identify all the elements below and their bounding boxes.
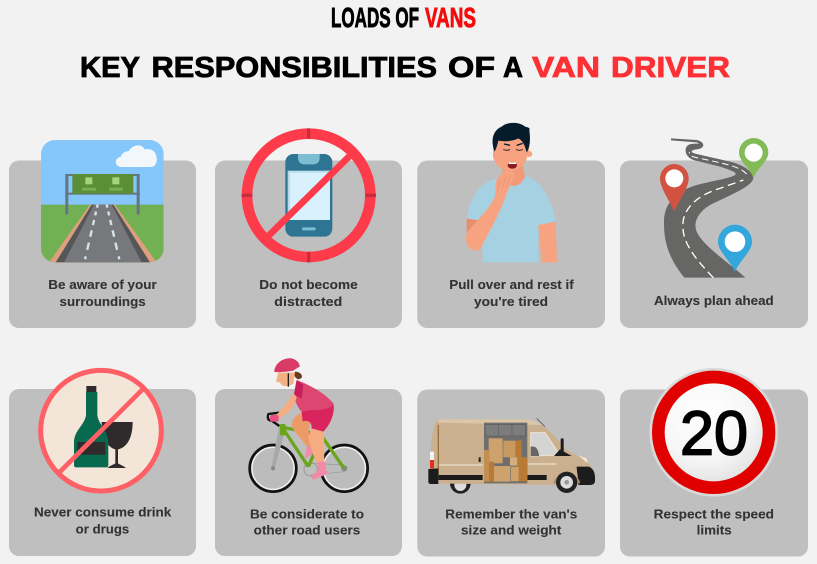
label [48,277,157,309]
panel: pull over and rest [417,123,605,328]
panel: be considerate to other road users [215,358,402,556]
label: other road users [254,523,360,538]
logo: LOADS OF [331,2,419,33]
title: RESPONSIBILITIES [152,52,437,84]
label: Remember the van's [445,506,577,521]
label: size and weight [461,523,562,538]
panel: be aware of your surroundings [9,140,196,328]
label: Be considerate to [250,506,364,521]
icon: motorway with gantry sign [41,140,164,262]
icon: crossed-out phone [242,128,376,262]
icon: crossed-out bottle and glass [41,370,161,491]
label: Always plan ahead [654,293,774,308]
panel: always plan ahead [620,138,808,328]
label: surroundings [60,294,146,309]
label [34,505,172,537]
label [259,277,358,309]
title: OF [448,52,495,84]
label: Be aware of your [48,277,157,292]
label: Pull over and rest if [449,277,574,292]
logo: VANS [425,2,476,33]
icon: delivery van with boxes [428,418,595,494]
icon: 20 speed limit sign [649,368,778,497]
title: A [503,52,523,84]
label [449,277,574,309]
label: distracted [274,294,342,309]
panel: do not become distracted [215,128,402,328]
label: you're tired [474,294,548,309]
title: VAN [532,52,600,84]
icon: 20 speed limit sign: 20 [680,400,748,469]
label [654,506,774,538]
title: KEY [80,52,140,84]
label: Do not become [259,277,358,292]
label: limits [697,523,732,538]
panel: remember the van's size and weight [417,390,605,556]
panel: respect the speed limits [620,368,808,556]
label [250,506,364,538]
label: Never consume drink [34,505,172,520]
panel: never consume drink or drugs [9,370,196,556]
label: or drugs [76,522,129,537]
label: Respect the speed [654,506,774,521]
title: DRIVER [611,52,730,84]
label [445,506,577,538]
icon: yawning man [466,123,557,262]
icon: winding road with pins [660,138,768,278]
icon: cyclist [250,358,368,492]
title [80,52,730,84]
